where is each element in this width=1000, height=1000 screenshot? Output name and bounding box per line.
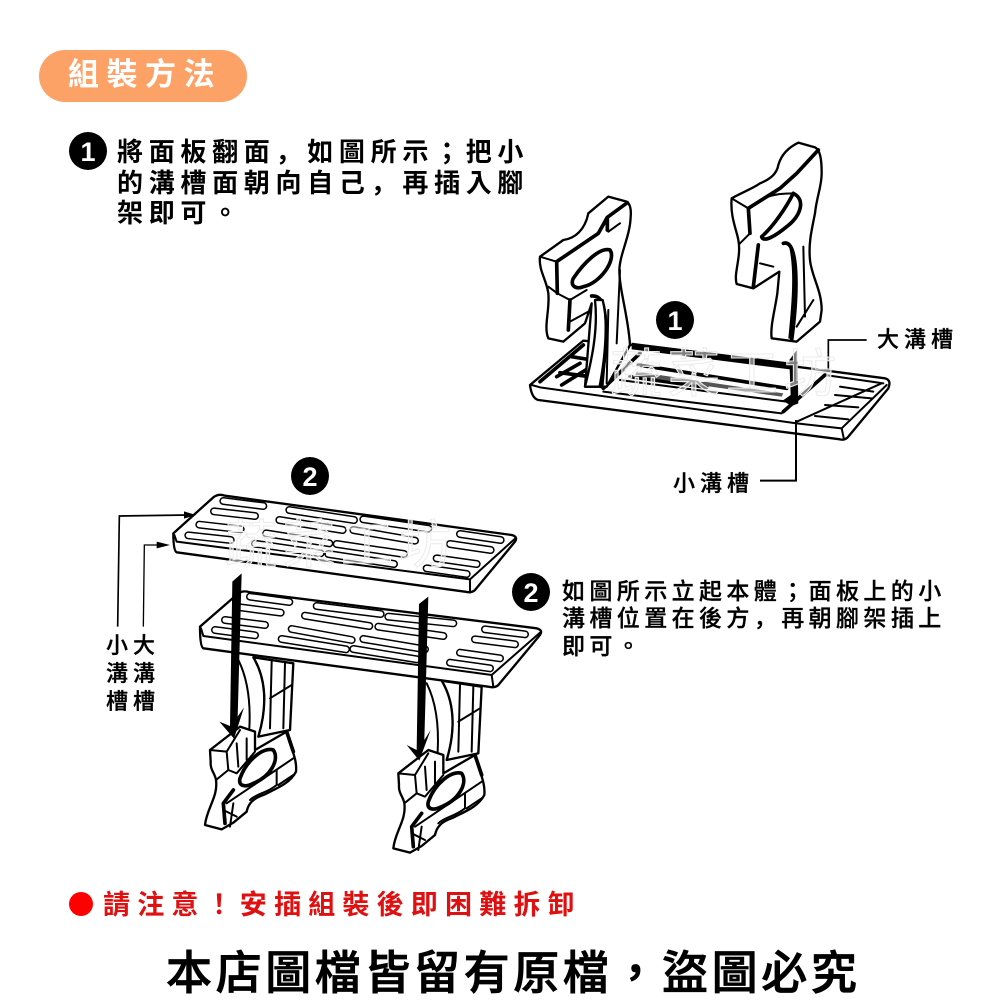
step 2 instructions: 如圖所示立起本體；面板上的小 bbox=[562, 578, 946, 604]
title pill bbox=[39, 50, 247, 102]
right foot bbox=[731, 143, 822, 342]
illustration: lowering the panel onto the legs bbox=[118, 495, 541, 853]
badge on illustration 1: 1 bbox=[667, 306, 683, 336]
panel tray bbox=[530, 341, 889, 440]
title text: 組裝方法 bbox=[68, 57, 222, 92]
insertion arrow bbox=[783, 349, 798, 406]
callout line: large groove bbox=[143, 545, 158, 627]
step 2 instructions bbox=[562, 578, 946, 659]
lower panel bbox=[200, 591, 541, 687]
step 2 instructions: 即可。 bbox=[562, 633, 644, 659]
badge on illustration 1 bbox=[656, 301, 694, 339]
callout line: small groove bbox=[118, 515, 188, 627]
watermark lower: 蔬菜工坊 bbox=[225, 517, 457, 575]
step 1 instructions: 的溝槽面朝向自己，再插入腳 bbox=[117, 163, 529, 200]
warning dot bbox=[69, 892, 93, 916]
step 2 badge on illustration bbox=[291, 457, 329, 495]
step 1 instructions: 架即可。 bbox=[117, 198, 244, 228]
label: small groove: 小溝槽 bbox=[673, 471, 754, 496]
step 1 number badge: 1 bbox=[80, 137, 96, 167]
step 2 number badge bbox=[512, 573, 550, 611]
vertical label: small groove: 溝 bbox=[106, 661, 128, 686]
label: large groove: 大溝槽 bbox=[877, 327, 958, 352]
legs bbox=[205, 657, 484, 853]
step 1 instructions: 將面板翻面，如圖所示；把小 bbox=[117, 132, 529, 169]
copyright notice: 本店圖檔皆留有原檔，盜圖必究 bbox=[166, 947, 860, 999]
step 2 instructions: 溝槽位置在後方，再朝腳架插上 bbox=[562, 599, 946, 633]
vertical label: large groove bbox=[133, 633, 155, 714]
arrowhead small groove bbox=[184, 511, 196, 519]
vertical label: small groove: 小 bbox=[106, 633, 128, 658]
upper panel bbox=[173, 495, 516, 593]
watermark top: 蔬菜工坊 bbox=[610, 346, 842, 404]
arrowhead large groove bbox=[157, 542, 170, 548]
vertical label: small groove: 槽 bbox=[106, 689, 128, 714]
right arrow bbox=[407, 597, 431, 761]
vertical label: large groove: 槽 bbox=[133, 689, 155, 714]
step 2 number badge: 2 bbox=[523, 578, 539, 608]
warning text: 請注意！安插組裝後即困難拆卸 bbox=[103, 890, 582, 920]
left arrow bbox=[219, 573, 244, 739]
illustration: legs being inserted into the panel bbox=[530, 143, 889, 481]
step 1 instructions bbox=[117, 132, 529, 228]
warning bbox=[69, 890, 582, 920]
vertical label: large groove: 溝 bbox=[133, 661, 155, 686]
callout line: large groove bbox=[828, 340, 867, 372]
left foot bbox=[540, 197, 631, 387]
callout line: small groove bbox=[760, 420, 796, 481]
step 1 number badge bbox=[69, 132, 107, 170]
step 2 badge on illustration: 2 bbox=[302, 462, 318, 492]
vertical label: small groove bbox=[106, 633, 128, 714]
vertical label: large groove: 大 bbox=[133, 633, 155, 658]
